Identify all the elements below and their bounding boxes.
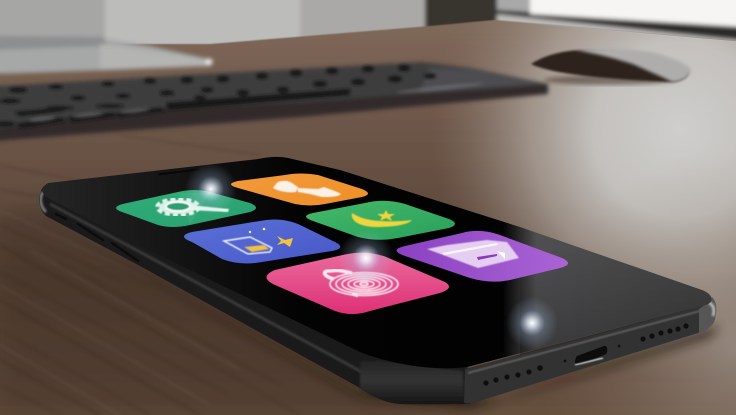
gear glyph [157,199,229,215]
corner bumper right [699,297,716,333]
phone side left [39,186,470,404]
keyboard keys [0,65,436,128]
app icon: battery [184,220,340,263]
microphone dots [564,345,620,362]
icon facet [178,193,210,224]
screen lower shading [520,227,712,355]
shadow on desk [0,205,470,415]
front edge [464,300,716,404]
folder glyph [427,240,519,268]
wood grain [0,135,300,415]
mouse [531,49,691,85]
charging port [575,346,607,365]
screen glass [43,157,712,368]
battery charge [244,245,269,252]
app icon: purple folder [396,231,568,282]
speaker notch [158,168,200,175]
phone shadow [40,218,720,410]
keyboard [0,62,548,141]
app icon: crescent moon [306,201,455,240]
app icon: settings gear [116,190,256,227]
folder arrow [477,254,497,260]
front edge upper highlight [468,311,700,373]
keyboard highlights [29,81,484,122]
fingerprint glyph [325,270,398,296]
battery outline [224,237,272,254]
corner bumper [360,361,464,404]
left silver tip [41,192,46,212]
side buttons [56,214,138,261]
sparkle dots [249,231,251,233]
hand glyph [297,187,341,197]
background wall [0,0,736,55]
window frame post [425,0,497,31]
smartphone [39,157,720,410]
crescent [352,213,412,227]
star [377,210,395,221]
app icon: pink fingerprint [266,253,449,314]
light flares [185,163,558,349]
bottom speaker holes left [483,365,543,386]
lightning bolt [277,236,293,247]
app icon: orange hand [231,174,368,206]
bell glyph [273,181,298,192]
window [495,0,736,41]
monitor stand [0,36,213,74]
bottom speaker holes right [640,323,689,342]
side highlight [50,204,362,372]
